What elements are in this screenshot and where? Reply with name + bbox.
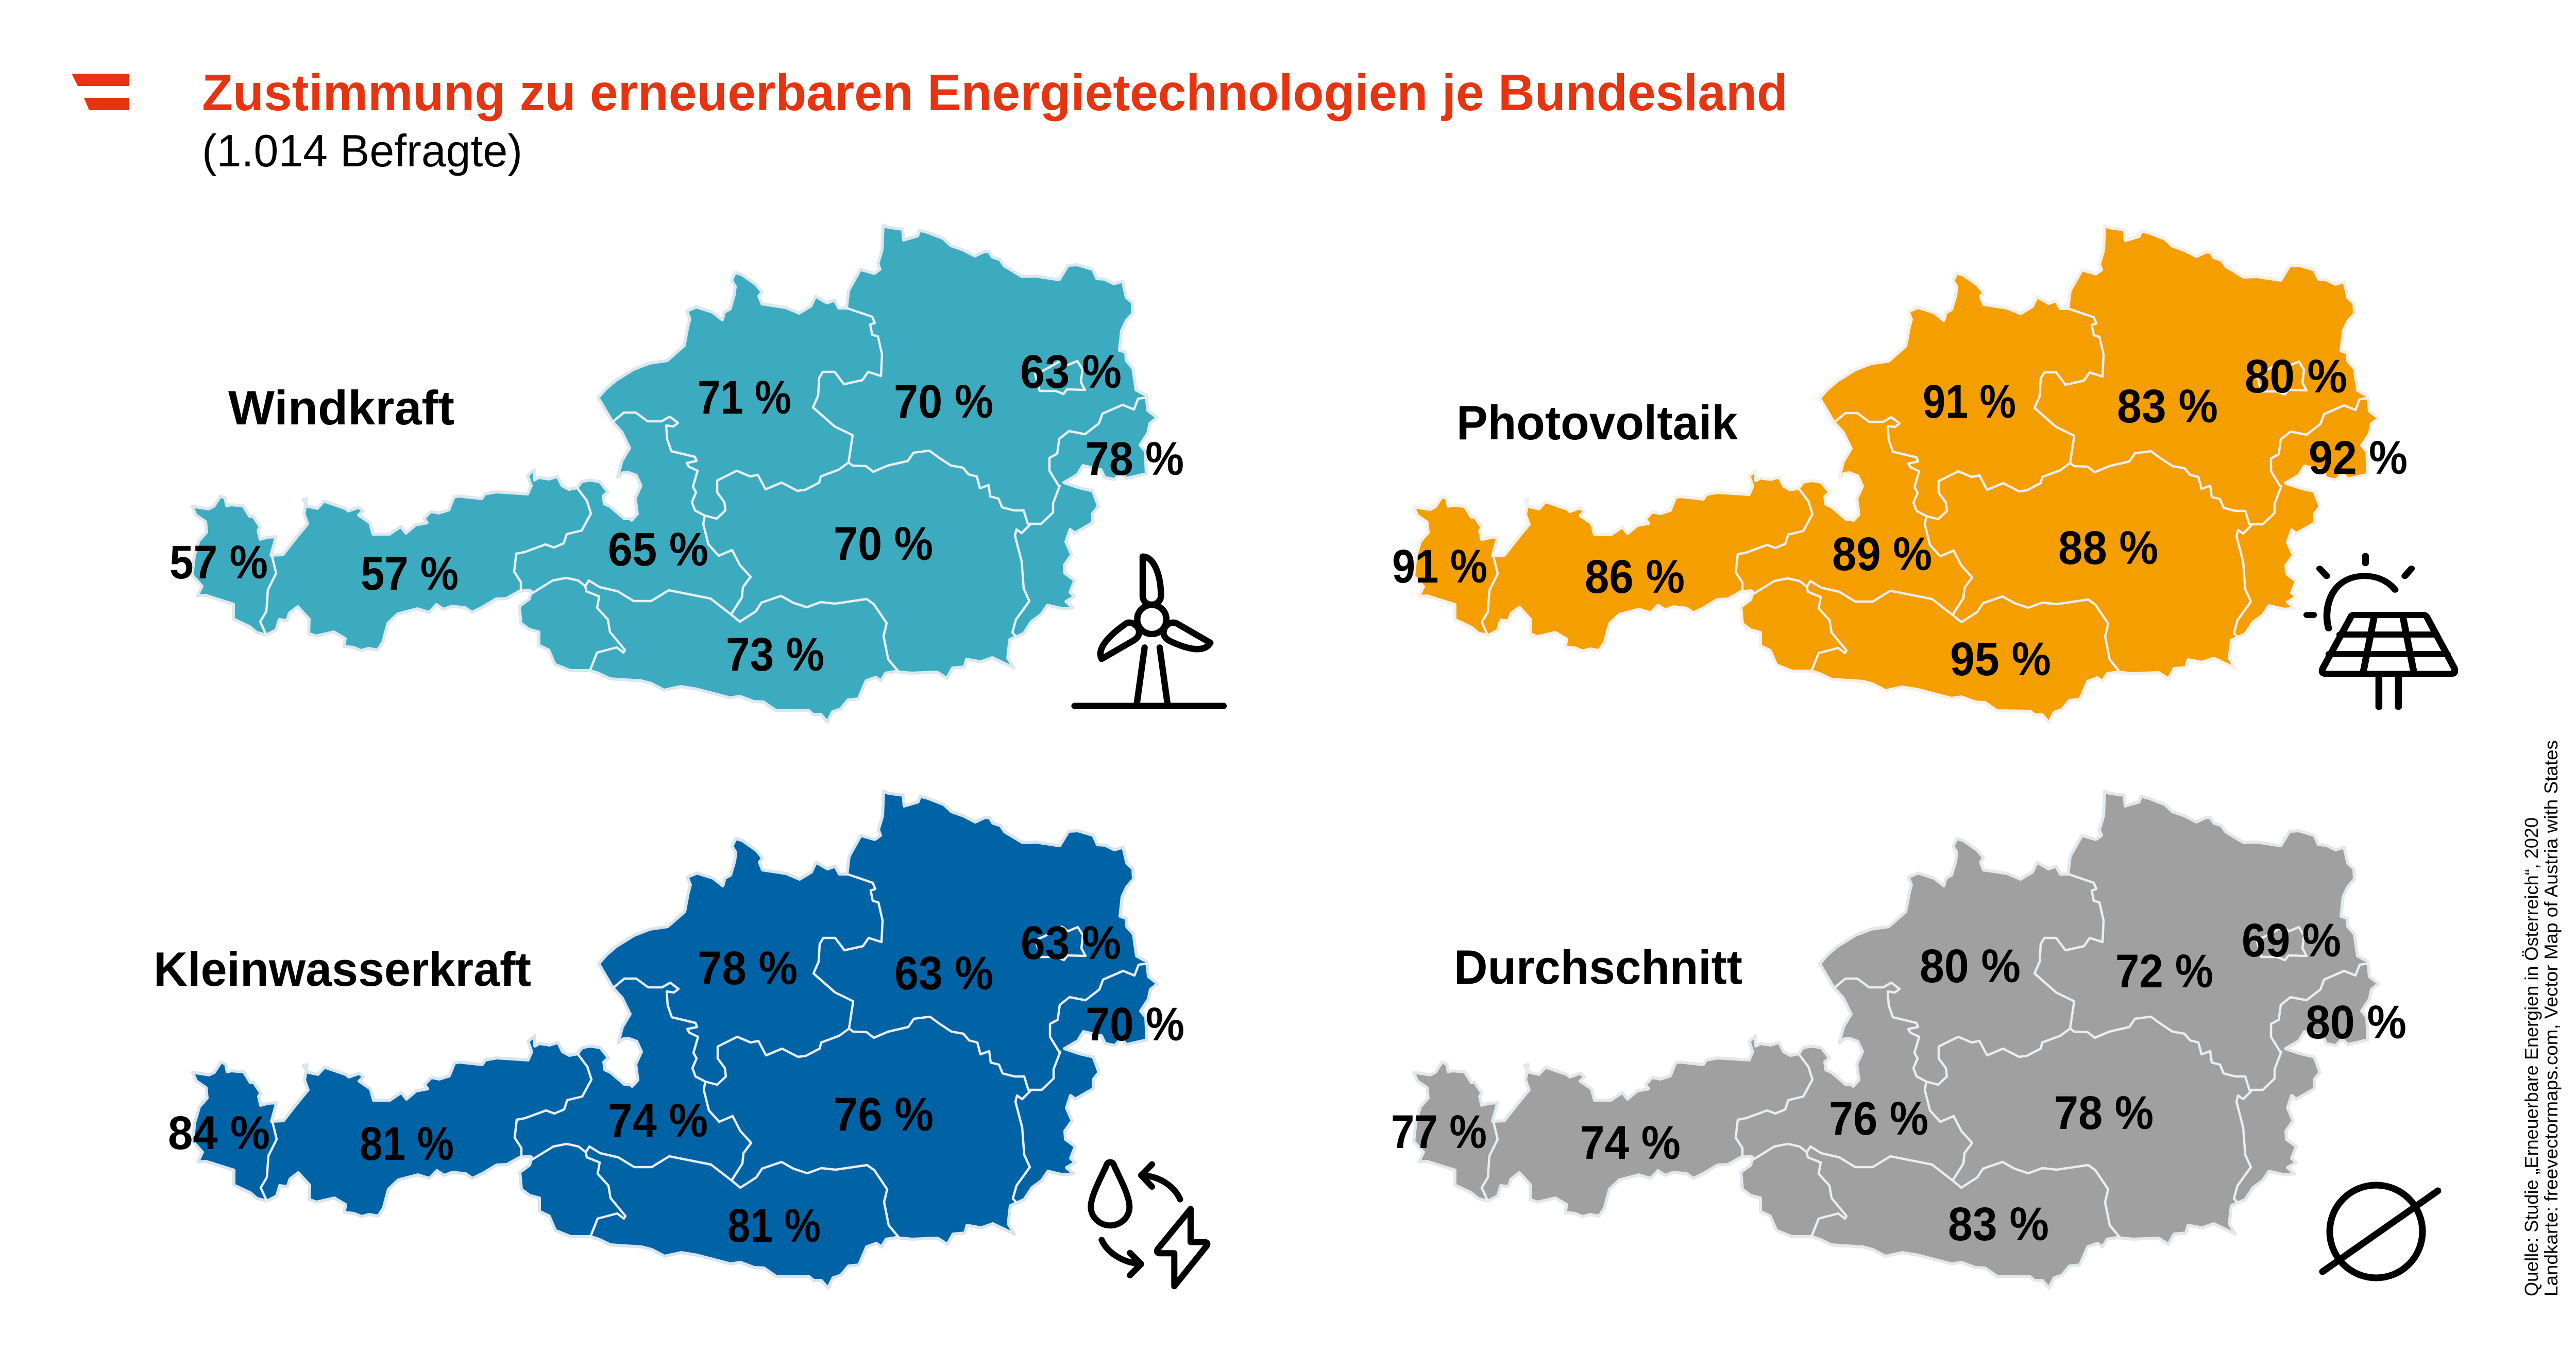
values: Windkraft: 57 % — [170, 536, 268, 589]
values: Durchschnitt: 76 % — [1829, 1092, 1928, 1145]
values: Durchschnitt: 83 % — [1948, 1198, 2049, 1251]
icon: Austrian flag logo — [72, 74, 129, 110]
title: Zustimmung zu erneuerbaren Energietechnologien je Bundesland — [202, 64, 1788, 122]
values: Photovoltaik: 88 % — [2058, 522, 2158, 574]
icon: average symbol — [2323, 1185, 2438, 1278]
values: Durchschnitt: 78 % — [2054, 1087, 2154, 1139]
values: Windkraft: 70 % — [894, 375, 993, 428]
source note: Quelle: Studie „Erneuerbare Energien in Österreich“, 2020 — [2521, 817, 2542, 1296]
heading: Kleinwasserkraft: Kleinwasserkraft — [154, 942, 531, 996]
panel: Kleinwasserkraft — [154, 791, 1207, 1288]
values: Photovoltaik: 80 % — [2245, 350, 2347, 403]
panel: Photovoltaik — [1392, 226, 2455, 723]
values: Photovoltaik: 86 % — [1585, 551, 1685, 603]
values: Durchschnitt: 72 % — [2115, 945, 2213, 998]
values: Photovoltaik: 83 % — [2117, 380, 2218, 433]
values: Kleinwasserkraft: 74 % — [608, 1094, 708, 1147]
values: Durchschnitt: 80 % — [2306, 996, 2406, 1049]
values: Kleinwasserkraft: 76 % — [834, 1088, 934, 1141]
values: Durchschnitt — [1391, 914, 2406, 1251]
values: Durchschnitt: 74 % — [1580, 1117, 1681, 1169]
values: Kleinwasserkraft: 63 % — [894, 947, 993, 1000]
map: Kleinwasserkraft — [193, 791, 1158, 1288]
values: Photovoltaik: 95 % — [1950, 633, 2051, 686]
heading: Durchschnitt: Durchschnitt — [1454, 940, 1742, 994]
values: Photovoltaik: 92 % — [2309, 432, 2408, 484]
map: Photovoltaik — [1414, 226, 2379, 723]
icon: water, electricity cycle — [1091, 1162, 1207, 1286]
values: Windkraft: 63 % — [1020, 346, 1122, 398]
panel: Durchschnitt — [1391, 791, 2438, 1288]
icon: wind turbine — [1075, 557, 1224, 706]
values: Windkraft: 71 % — [698, 371, 791, 424]
values: Photovoltaik: 89 % — [1832, 528, 1932, 580]
map: Durchschnitt — [1414, 791, 2379, 1288]
values: Kleinwasserkraft — [168, 917, 1184, 1252]
source note — [2521, 740, 2562, 1296]
values: Windkraft: 73 % — [726, 628, 824, 681]
values: Kleinwasserkraft: 78 % — [698, 942, 798, 995]
values: Durchschnitt: 69 % — [2242, 914, 2341, 967]
values: Kleinwasserkraft: 70 % — [1086, 998, 1184, 1051]
values: Kleinwasserkraft: 81 % — [727, 1200, 821, 1252]
values: Windkraft: 78 % — [1085, 433, 1184, 485]
map: Windkraft — [192, 225, 1157, 722]
values: Durchschnitt: 77 % — [1391, 1106, 1487, 1158]
values: Photovoltaik: 91 % — [1392, 540, 1487, 593]
icon: sun and solar panel — [2307, 556, 2455, 707]
values: Kleinwasserkraft: 84 % — [168, 1107, 270, 1159]
values: Windkraft: 65 % — [608, 523, 708, 576]
values: Windkraft: 70 % — [834, 518, 933, 570]
heading: Photovoltaik: Photovoltaik — [1456, 396, 1738, 450]
values: Durchschnitt: 80 % — [1920, 940, 2021, 992]
source note: Landkarte: freevectormaps.com, Vector Map of Austria with States — [2540, 740, 2562, 1296]
values: Windkraft: 57 % — [361, 547, 459, 600]
panel: Windkraft — [170, 225, 1224, 722]
values: Kleinwasserkraft: 81 % — [360, 1118, 454, 1170]
values: Kleinwasserkraft: 63 % — [1021, 917, 1121, 969]
values: Windkraft — [170, 346, 1184, 681]
values: Photovoltaik — [1392, 350, 2408, 686]
values: Photovoltaik: 91 % — [1923, 375, 2016, 428]
heading: Windkraft: Windkraft — [228, 381, 454, 435]
subtitle: (1.014 Befragte) — [202, 125, 522, 176]
